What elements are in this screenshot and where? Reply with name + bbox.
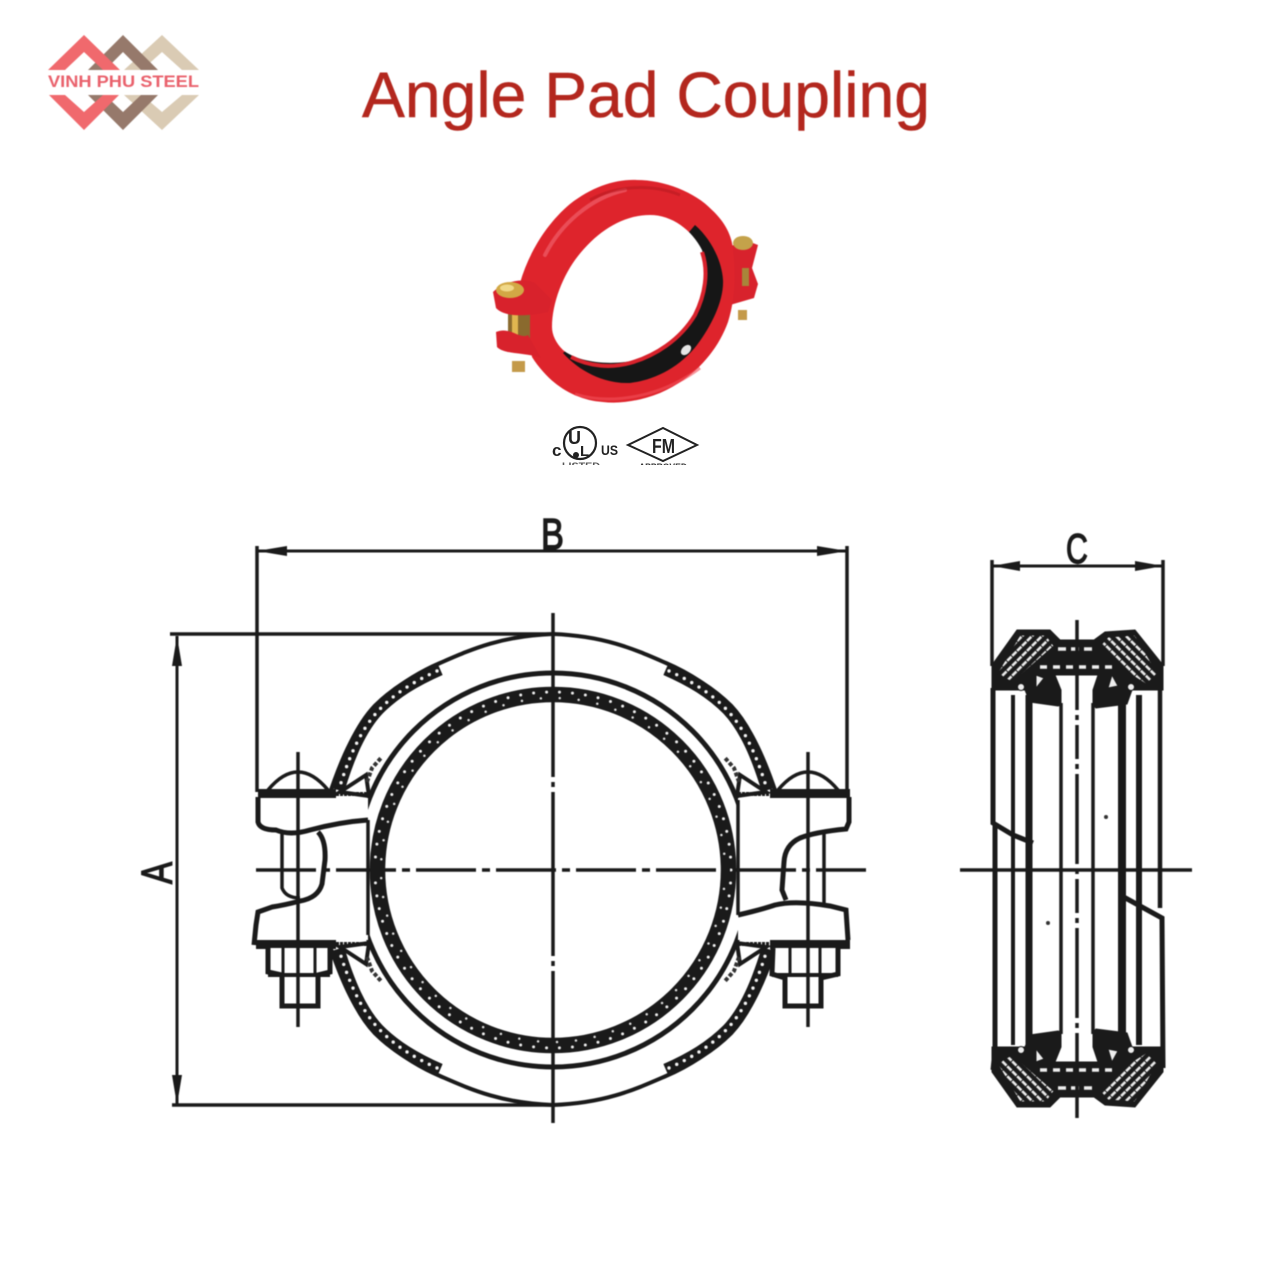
dimension C: C: [1066, 525, 1088, 572]
wall vertical lines: [993, 688, 1163, 1070]
UL listed mark: US: [601, 442, 618, 458]
UL listed mark: [552, 427, 618, 471]
UL listed mark: LISTED: [562, 461, 601, 471]
FM approved mark: APPROVED: [639, 462, 687, 473]
FM approved mark: [628, 428, 697, 473]
dimension A: A: [134, 862, 182, 884]
dimension C: [992, 525, 1163, 666]
top wall section: [992, 630, 1163, 708]
left bolt and pads: [254, 752, 368, 1027]
product photo: red coupling: [493, 180, 758, 403]
UL listed mark: U: [568, 428, 581, 448]
dimension A: [134, 634, 553, 1105]
title: Angle Pad Coupling: [362, 59, 930, 131]
UL listed mark: L: [580, 443, 589, 460]
housing inner ring: [356, 673, 750, 1067]
side centre lines: [960, 620, 1192, 1118]
front view drawing: [134, 510, 866, 1123]
dimension B: [257, 510, 847, 792]
dimension B: B: [541, 510, 564, 559]
logo: Vinh Phu Steel: [48, 35, 199, 130]
FM approved mark: FM: [652, 436, 675, 458]
side view drawing: [960, 525, 1192, 1118]
gasket ring: [375, 692, 731, 1048]
UL listed mark: c: [552, 441, 561, 460]
logo: Vinh Phu Steel: VINH PHU STEEL: [48, 73, 199, 91]
outer housing arcs: [331, 634, 775, 1105]
bottom wall section: [992, 1029, 1163, 1107]
centre lines: [256, 613, 866, 1123]
right bolt and pads: [738, 752, 850, 1027]
